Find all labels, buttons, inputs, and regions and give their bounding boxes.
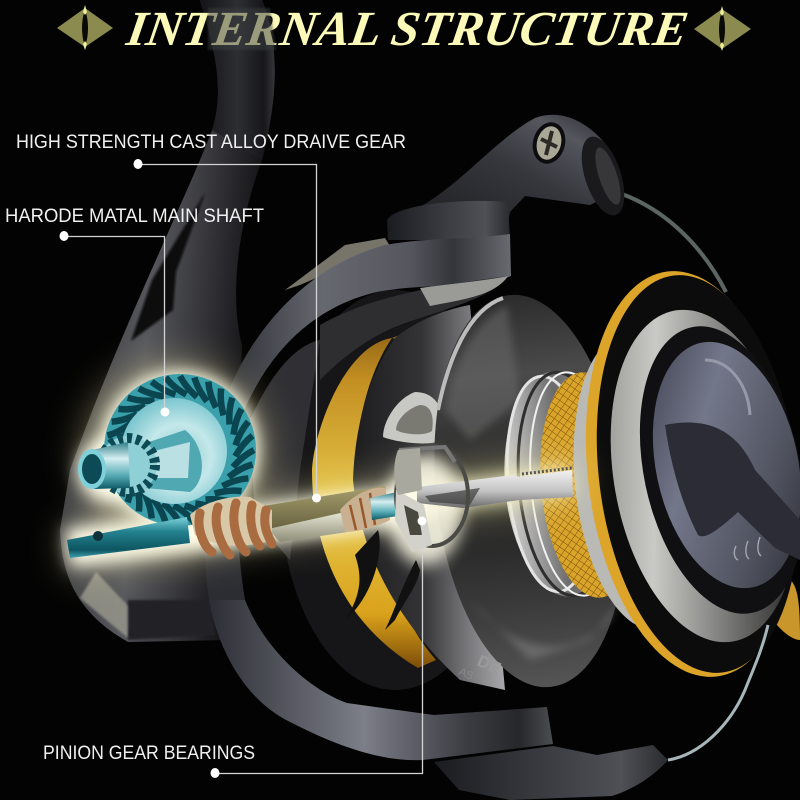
small copper thread [340, 488, 390, 532]
oscillation clip [394, 446, 468, 552]
spool cap [632, 328, 800, 602]
spool neck rings [495, 366, 629, 602]
silver shaft section [268, 512, 348, 542]
gold band [312, 308, 470, 668]
lower reel arm [209, 600, 668, 800]
rotor rear body [250, 276, 510, 690]
title: INTERNAL STRUCTURE [122, 1, 692, 56]
teal rod [67, 517, 190, 558]
callout: pinion gear bearings: PINION GEAR BEARINGS [43, 743, 255, 764]
pinion gear [78, 436, 157, 494]
bail wire [622, 194, 726, 292]
rotor window [383, 392, 443, 443]
callout: main shaft: HARODE MATAL MAIN SHAFT [5, 206, 264, 227]
lower left frame [205, 408, 245, 600]
teal end [370, 492, 398, 520]
callout: drive gear: HIGH STRENGTH CAST ALLOY DRAIVE GEAR [16, 132, 406, 153]
knurled gold collar [531, 368, 651, 602]
silver threaded bar [417, 468, 573, 508]
spool cup [416, 285, 644, 697]
reel leg and stem [60, 0, 275, 642]
drive gear [104, 374, 256, 526]
bail arm with screw [395, 115, 633, 238]
bottom wire [668, 625, 768, 760]
brand text on spool: DE [474, 651, 504, 678]
title ornament right [694, 6, 751, 51]
main shaft [67, 486, 398, 558]
upper rotor arm [222, 201, 511, 420]
spool rear silver strip [560, 328, 720, 636]
callout: main shaft [5, 206, 264, 416]
gold shaft section [240, 486, 388, 535]
callout: drive gear [16, 132, 406, 502]
screw [528, 119, 570, 167]
cap handle [665, 423, 800, 560]
glow behind gear and shaft [68, 365, 575, 565]
title ornament left [57, 5, 113, 50]
spool cup: AS [457, 666, 475, 683]
callout: pinion gear bearings [43, 516, 426, 778]
copper worm [190, 497, 272, 545]
rotor cylinder [353, 305, 505, 690]
dark spokes below clip [345, 530, 420, 630]
cap holes [734, 537, 761, 560]
spool front face [564, 259, 800, 689]
gold blob right of spool [770, 575, 800, 640]
